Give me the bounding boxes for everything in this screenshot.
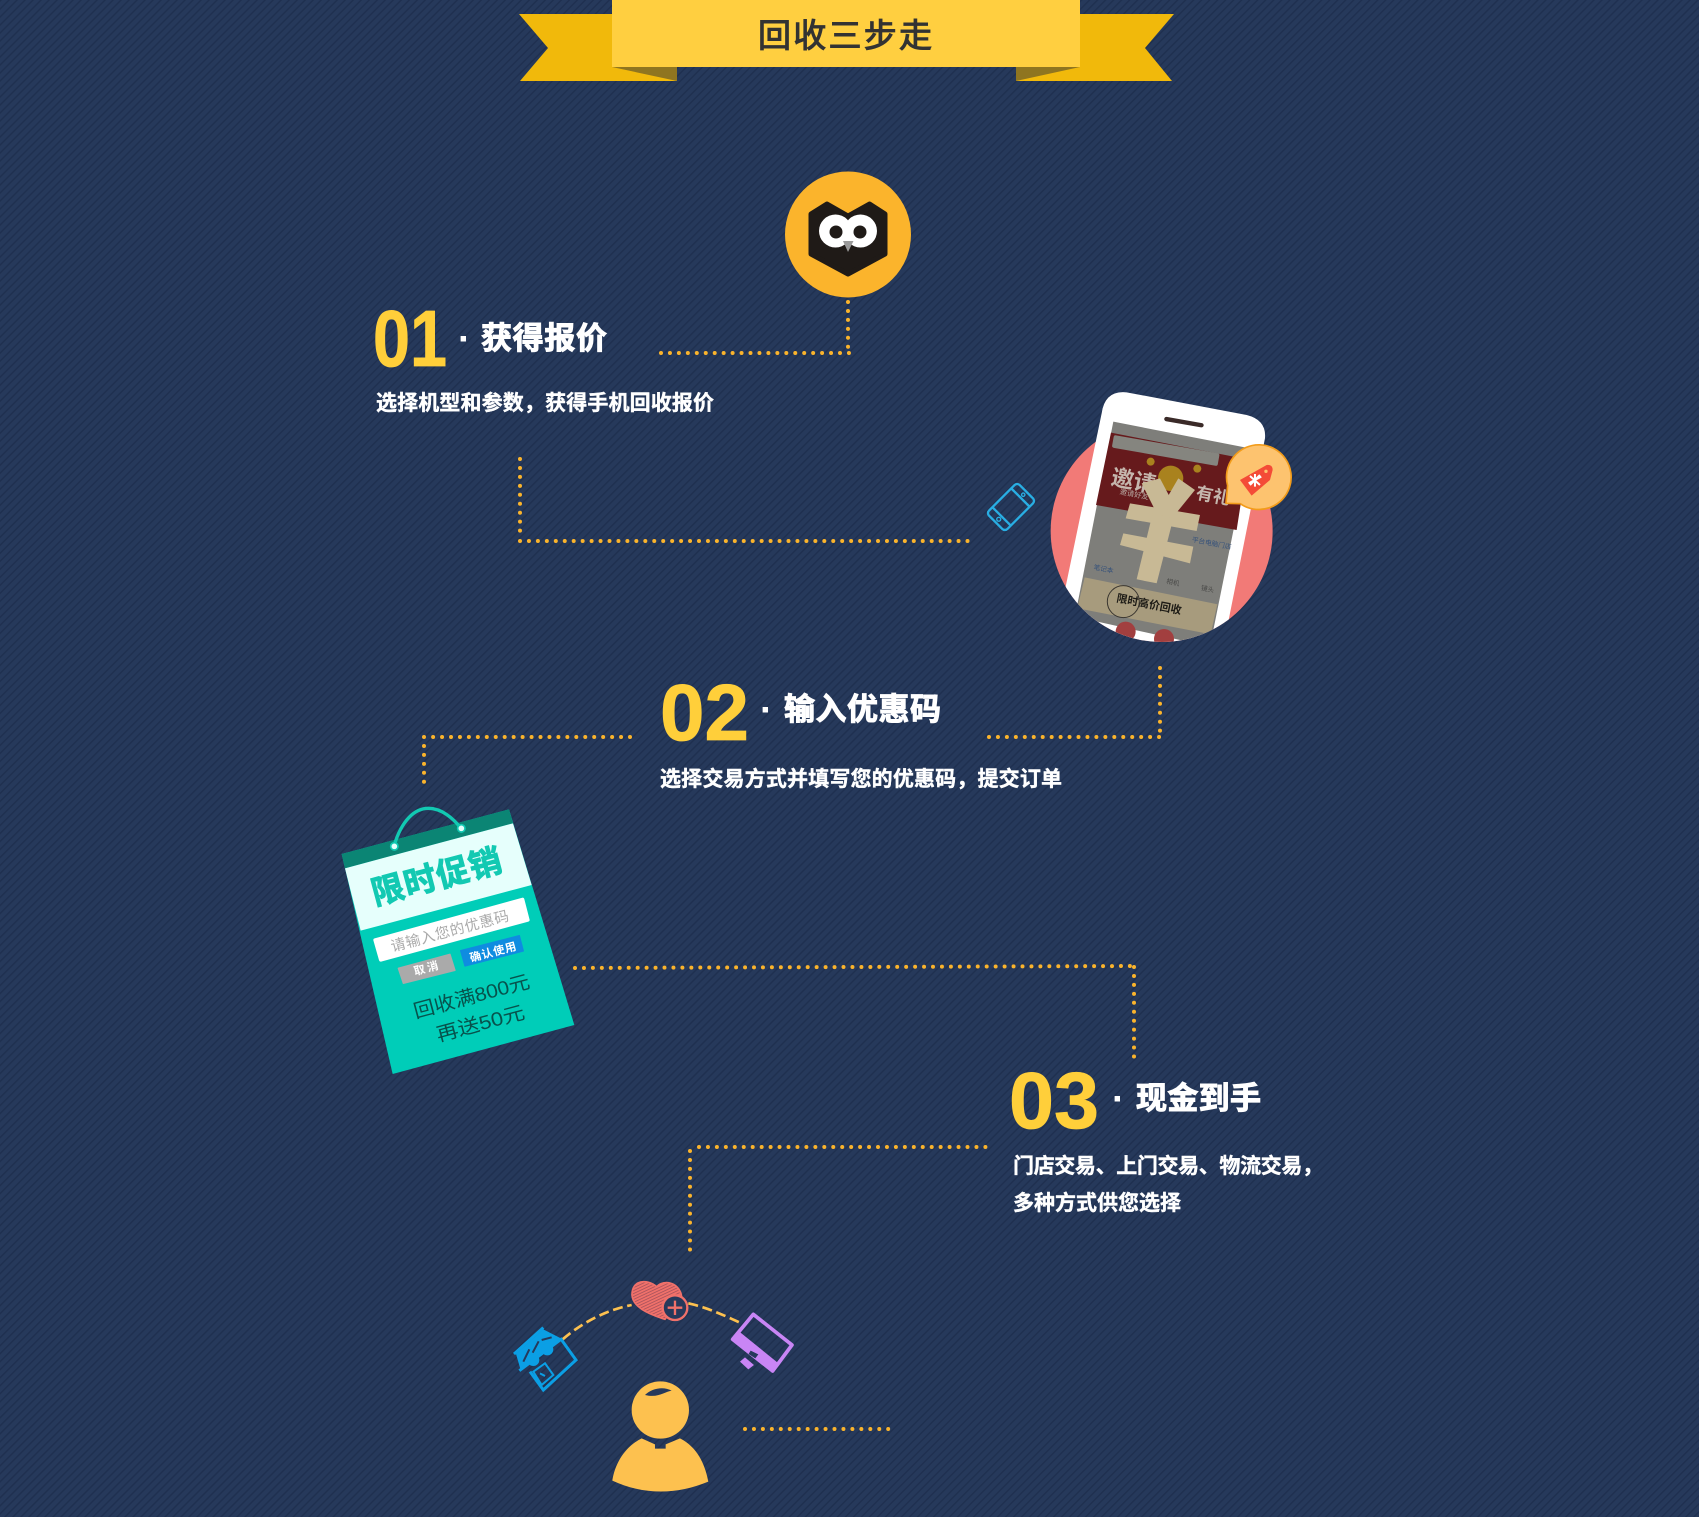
step 3 heading: 03 bbox=[1009, 1056, 1099, 1145]
tag top strip bbox=[342, 809, 513, 868]
connector: step 3 to icons bbox=[690, 1147, 987, 1251]
title banner bbox=[519, 0, 1174, 81]
step 1 heading: · bbox=[459, 321, 469, 356]
icon: store bbox=[514, 1328, 576, 1390]
phone screen bbox=[1075, 422, 1250, 647]
banner right fold bbox=[1016, 67, 1080, 81]
step 1 heading: 01 bbox=[373, 294, 447, 383]
step 3 description: 多种方式供您选择 bbox=[1013, 1191, 1181, 1215]
price tag bubble bbox=[1226, 445, 1291, 509]
step 3 description bbox=[1013, 1154, 1323, 1215]
step 2 heading bbox=[660, 668, 941, 757]
step 2 heading: 输入优惠码 bbox=[784, 692, 941, 727]
phone screen text: 平台电脑门店 bbox=[1191, 535, 1233, 551]
step 2 description: 选择交易方式并填写您的优惠码，提交订单 bbox=[660, 767, 1062, 791]
step 1 heading: 获得报价 bbox=[481, 321, 607, 356]
phone screen text: 有礼 bbox=[1194, 483, 1232, 509]
step 3 heading bbox=[1009, 1056, 1261, 1145]
phone illustration bbox=[1051, 392, 1291, 663]
step 1 description: 选择机型和参数，获得手机回收报价 bbox=[376, 391, 714, 415]
icon: monitor bbox=[733, 1314, 792, 1371]
step 3 description: 门店交易、上门交易、物流交易， bbox=[1013, 1154, 1323, 1178]
banner left tail bbox=[519, 14, 677, 81]
icon: person bbox=[612, 1381, 708, 1492]
coupon tag illustration bbox=[342, 808, 574, 1074]
phone screen text: 限时高价回收 bbox=[1115, 591, 1183, 617]
banner right tail bbox=[1016, 14, 1174, 81]
step 1 heading bbox=[373, 294, 607, 383]
confirm button bbox=[461, 936, 523, 966]
connector: step 2 to coupon bbox=[424, 737, 630, 787]
icon: heart plus bbox=[632, 1282, 687, 1320]
icon: small phone outline bbox=[986, 482, 1036, 531]
coupon tag illustration: 取消 bbox=[412, 958, 440, 978]
coupon input bbox=[375, 899, 528, 960]
coupon tag illustration: 确认使用 bbox=[468, 939, 518, 965]
phone body bbox=[1066, 392, 1266, 642]
tag handle bbox=[394, 808, 461, 846]
cancel button bbox=[398, 954, 455, 983]
phone screen text bbox=[1093, 464, 1233, 617]
coupon tag illustration: 再送50元 bbox=[434, 1002, 527, 1046]
promo text: 回收满800元 bbox=[411, 971, 532, 1023]
tag body bbox=[342, 809, 574, 1074]
connector: step 1 to phone bbox=[520, 459, 972, 541]
step 3 heading: 现金到手 bbox=[1136, 1081, 1261, 1116]
step 2 heading: 02 bbox=[660, 668, 749, 757]
pink circle bbox=[1051, 420, 1273, 642]
banner left fold bbox=[612, 67, 677, 81]
phone screen text: 镜头 bbox=[1200, 583, 1215, 595]
connector: person to right bbox=[745, 1427, 889, 1431]
connector: owl to step 1 bbox=[661, 302, 850, 353]
step 3 heading: · bbox=[1113, 1081, 1123, 1116]
speaker slot bbox=[1164, 417, 1204, 428]
icon: owl badge bbox=[785, 172, 911, 298]
phone screen text: 邀请 bbox=[1109, 464, 1158, 498]
tag light band bbox=[345, 823, 532, 931]
tag heading: 限时促销 bbox=[367, 842, 506, 912]
banner main ribbon bbox=[612, 0, 1080, 67]
dashed arc bbox=[563, 1303, 740, 1339]
connector: coupon to step 3 bbox=[575, 966, 1134, 1058]
coupon tag illustration: 请输入您的优惠码 bbox=[389, 908, 511, 956]
phone screen text: 笔记本 bbox=[1093, 562, 1115, 575]
connector: phone to step 2 right bbox=[989, 668, 1161, 737]
trade options illustration bbox=[514, 1282, 792, 1492]
banner heading: 回收三步走 bbox=[758, 17, 932, 54]
step 2 heading: · bbox=[761, 692, 771, 727]
phone screen text: 相机 bbox=[1166, 576, 1181, 588]
phone screen text: 邀请好友 bbox=[1119, 487, 1150, 502]
yen sign bbox=[1120, 478, 1200, 583]
